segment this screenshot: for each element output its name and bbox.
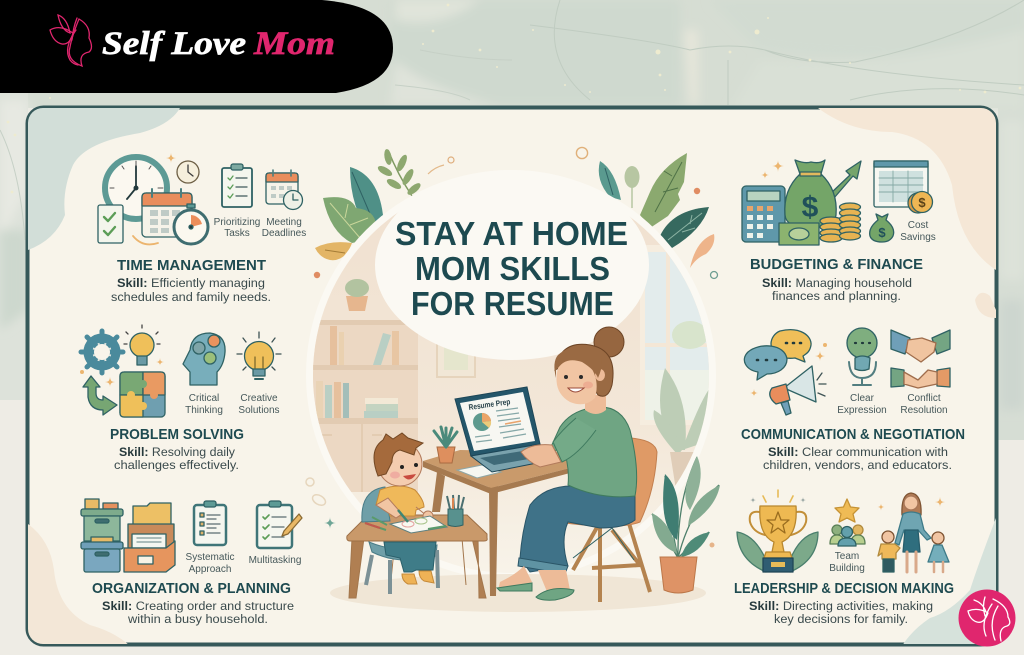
icon: savings bag bbox=[870, 214, 894, 242]
child: hair bbox=[374, 433, 423, 476]
corner wash: sage bottom right bbox=[902, 518, 996, 646]
woman: hands bbox=[521, 445, 561, 467]
title: MOM SKILLS bbox=[415, 250, 610, 287]
description: problem solving: Skill: Resolving daily bbox=[119, 445, 236, 459]
woman: neck bbox=[585, 395, 606, 414]
description: organization and planning: Skill: Creating order and structure bbox=[102, 599, 294, 613]
sparkle bbox=[324, 517, 336, 529]
heading: communication and negotiation: COMMUNICATION & NEGOTIATION bbox=[741, 426, 965, 443]
title blob bbox=[375, 170, 649, 360]
faded window plant bbox=[654, 368, 712, 490]
icon: handshakes bbox=[891, 330, 950, 388]
label: Prioritizing Tasks: Tasks bbox=[224, 228, 250, 239]
description: problem solving: challenges effectively. bbox=[114, 458, 239, 472]
icon: storage bins and file box bbox=[81, 499, 175, 572]
panel: infographic card bbox=[28, 108, 996, 646]
description: budgeting and finance: finances and planning. bbox=[772, 289, 901, 303]
description: leadership and decision making: key decisions for family. bbox=[774, 612, 908, 626]
heading: time management: TIME MANAGEMENT bbox=[117, 257, 266, 274]
woman: trousers bbox=[520, 486, 635, 572]
icon: spreadsheet and coin: $ bbox=[918, 195, 926, 210]
brand name: Self Love bbox=[102, 26, 246, 62]
icon: calendar and clock bbox=[266, 170, 302, 210]
child: legs bbox=[384, 542, 436, 572]
woman: sweater bbox=[545, 407, 637, 497]
label: Critical Thinking: Critical bbox=[189, 393, 219, 404]
description: budgeting and finance bbox=[762, 276, 912, 303]
label: Clear Expression: Clear bbox=[850, 393, 875, 404]
child: shoes bbox=[402, 571, 434, 584]
child drawing paper bbox=[365, 510, 447, 533]
corner wash: peach bottom left bbox=[28, 524, 130, 646]
description: organization and planning: within a busy household. bbox=[127, 612, 268, 626]
icon: star and team bbox=[830, 499, 865, 546]
label: Meeting Deadlines: Deadlines bbox=[262, 228, 306, 239]
label: Systematic Approach: Systematic bbox=[186, 552, 234, 563]
laptop screen text: Resume Prep bbox=[468, 397, 511, 412]
woman bbox=[497, 327, 637, 600]
corner wash: sage top left bbox=[28, 108, 180, 250]
icon: savings bag: $ bbox=[878, 225, 886, 240]
corner wash: peach top right bbox=[818, 108, 996, 270]
section: problem solving bbox=[80, 325, 281, 472]
corner wash: small peach spot bbox=[975, 293, 996, 318]
description: communication and negotiation: children, vendors, and educators. bbox=[763, 458, 952, 472]
central illustration bbox=[300, 147, 730, 612]
label: Multitasking: Multitasking bbox=[249, 555, 301, 566]
section: communication and negotiation bbox=[741, 328, 965, 472]
icon: gear, bulb, arrows and puzzle bbox=[80, 325, 165, 417]
mom chair bbox=[565, 438, 657, 602]
laptop bbox=[455, 387, 547, 472]
thought rings bbox=[306, 478, 327, 507]
section: budgeting and finance bbox=[742, 160, 936, 303]
icon: calculator, money bag, coins and arrow: $ bbox=[802, 191, 819, 224]
child: shirt bbox=[376, 486, 424, 516]
section: time management bbox=[98, 153, 306, 304]
icon: speech bubbles and megaphone bbox=[744, 330, 827, 415]
bookshelf bbox=[312, 320, 418, 492]
description: organization and planning bbox=[102, 599, 294, 626]
child: head bbox=[378, 442, 422, 486]
title bbox=[395, 215, 628, 322]
white ring around room bbox=[306, 170, 716, 580]
label: Conflict Resolution: Conflict bbox=[907, 393, 941, 404]
description: leadership and decision making bbox=[749, 599, 933, 626]
child table bbox=[347, 515, 487, 598]
icon: calculator, money bag, coins and arrow bbox=[742, 160, 861, 245]
label: Cost Savings: Cost bbox=[908, 220, 929, 231]
label: Prioritizing Tasks: Prioritizing bbox=[214, 217, 260, 228]
floor shadow bbox=[330, 574, 706, 612]
description: time management bbox=[111, 276, 271, 304]
woman: face bbox=[556, 359, 597, 404]
child bbox=[374, 433, 436, 584]
leaves: upper left bbox=[314, 149, 454, 278]
laptop chart bbox=[473, 413, 491, 431]
label: Cost Savings: Savings bbox=[900, 232, 936, 243]
icon: parent and children bbox=[878, 493, 949, 572]
label: Critical Thinking: Thinking bbox=[185, 405, 223, 416]
header bar bbox=[0, 0, 393, 93]
icon: head with gears bbox=[183, 333, 225, 385]
icon: multitasking clipboard and pencil bbox=[257, 501, 302, 548]
icon: trophy and laurel bbox=[737, 490, 818, 572]
window bbox=[640, 245, 709, 420]
picture frame bbox=[436, 344, 476, 378]
heading: problem solving: PROBLEM SOLVING bbox=[110, 426, 244, 443]
potted plant bbox=[652, 456, 720, 593]
icon: clipboard checklist bbox=[222, 164, 252, 207]
section: organization and planning bbox=[81, 499, 302, 626]
shelf plant bbox=[345, 279, 369, 311]
label: Clear Expression: Expression bbox=[837, 405, 887, 416]
leaves: upper right bbox=[576, 147, 718, 278]
label: Team Building: Team bbox=[835, 551, 859, 562]
heading: budgeting and finance: BUDGETING & FINANCE bbox=[750, 256, 923, 273]
description: time management: Skill: Efficiently managing bbox=[117, 276, 265, 290]
label: Meeting Deadlines: Meeting bbox=[266, 217, 302, 228]
desk plant bbox=[434, 427, 457, 463]
pencil cup bbox=[447, 495, 464, 526]
description: problem solving bbox=[114, 445, 239, 472]
heading: organization and planning: ORGANIZATION & PLANNING bbox=[92, 580, 291, 597]
woman: hair back bbox=[555, 344, 613, 396]
description: budgeting and finance: Skill: Managing household bbox=[762, 276, 912, 290]
child chair bbox=[362, 487, 438, 594]
woman: feet and slippers bbox=[498, 566, 532, 590]
section: leadership and decision making bbox=[734, 490, 954, 626]
title: FOR RESUME bbox=[411, 285, 614, 322]
heading: leadership and decision making: LEADERSHIP & DECISION MAKING bbox=[734, 580, 954, 597]
icon: clock cluster bbox=[98, 153, 208, 244]
label: Team Building: Building bbox=[829, 563, 865, 574]
label: Conflict Resolution: Resolution bbox=[900, 405, 948, 416]
room scene bbox=[313, 213, 709, 573]
desk paper bbox=[457, 465, 501, 478]
icon: spreadsheet and coin bbox=[874, 161, 932, 213]
adult desk bbox=[423, 450, 580, 596]
logo icon: woman and leaves bbox=[50, 15, 92, 66]
icon: systematic clipboard bbox=[194, 501, 226, 545]
description: communication and negotiation: Skill: Clear communication with bbox=[768, 445, 948, 459]
icon: microphone bbox=[847, 328, 877, 385]
woman: bun bbox=[594, 327, 624, 357]
description: leadership and decision making: Skill: Directing activities, making bbox=[749, 599, 933, 613]
label: Creative Solutions: Solutions bbox=[238, 405, 280, 416]
header bar: Mom bbox=[253, 26, 335, 62]
icon: creative lightbulb bbox=[237, 332, 281, 379]
title: STAY AT HOME bbox=[395, 215, 628, 252]
label: Systematic Approach: Approach bbox=[189, 564, 231, 575]
description: communication and negotiation bbox=[763, 445, 952, 472]
label: Creative Solutions: Creative bbox=[240, 393, 278, 404]
description: time management: schedules and family needs. bbox=[111, 290, 271, 304]
badge: logo circle bbox=[958, 590, 1016, 646]
